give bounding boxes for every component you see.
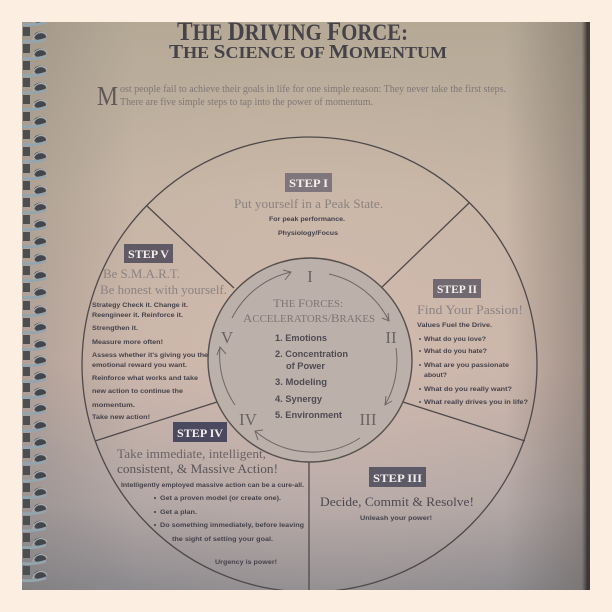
step 4 list <box>121 482 304 566</box>
roman numerals: IV <box>239 410 258 429</box>
step 2 heading: Find Your Passion! <box>417 302 523 317</box>
step 1 notes: For peak performance. <box>269 216 345 223</box>
step 5 list: Take new action! <box>92 414 150 421</box>
panel: step 3 <box>320 467 474 522</box>
step 5 list: Measure more often! <box>92 339 163 346</box>
intro line one: ost people fail to achieve their goals in life for one simple reason: They never take the first steps. <box>120 84 506 95</box>
step 2 list: Values Fuel the Drive. <box>417 322 492 329</box>
step 4 list: Urgency is power! <box>215 559 277 566</box>
step 2 list: What do you really want? <box>424 386 512 393</box>
step 5 heading: Be honest with yourself. <box>100 282 227 297</box>
step 1 label <box>285 173 332 192</box>
panel: step 2 <box>417 279 528 406</box>
step 5 list <box>92 302 208 421</box>
momentum wheel <box>82 137 537 592</box>
step 4 heading: consistent, & Massive Action! <box>117 461 278 476</box>
step 3 label <box>369 467 426 487</box>
step 2 list: about? <box>424 372 447 379</box>
step 4 list: the sight of setting your goal. <box>172 536 273 543</box>
step 4 list: Do something immediately, before leaving <box>160 522 304 529</box>
forces list <box>275 333 348 420</box>
step 1 label: STEP I <box>289 176 328 190</box>
step 4 label <box>173 422 227 442</box>
step 3 note: Unleash your power! <box>360 515 432 522</box>
step 5 list: Assess whether it's giving you the <box>92 352 208 359</box>
panel: step 1 <box>234 173 383 237</box>
roman numerals: II <box>385 328 397 347</box>
hub heading <box>243 296 375 325</box>
step 4 list: Intelligently employed massive action can be a cure-all. <box>121 482 304 489</box>
forces list: 4. Synergy <box>275 394 322 404</box>
panel: step 5 <box>92 244 227 421</box>
step 1 notes: Physiology/Focus <box>278 230 338 237</box>
step 3 heading: Decide, Commit & Resolve! <box>320 494 474 509</box>
step 5 heading <box>100 266 227 297</box>
step 4 label: STEP IV <box>177 426 223 440</box>
step 5 label: STEP V <box>128 247 169 261</box>
roman numerals: V <box>221 328 234 347</box>
forces list: 1. Emotions <box>275 333 327 343</box>
hub disc <box>208 258 412 462</box>
spokes <box>95 203 525 590</box>
roman numerals <box>221 267 397 429</box>
intro line two: There are five simple steps to tap into the power of momentum. <box>120 97 373 108</box>
step 5 list: Reinforce what works and take <box>92 375 198 382</box>
step 2 label: STEP II <box>437 282 477 296</box>
intro text <box>97 81 506 111</box>
step 2 list: What really drives you in life? <box>424 399 528 406</box>
roman numerals: I <box>307 267 313 286</box>
step 5 list: new action to continue the <box>92 388 183 395</box>
title line two: THE SCIENCE OF MOMENTUM <box>169 41 447 63</box>
step 5 list: Strengthen it. <box>92 325 138 332</box>
hub heading: THE FORCES: <box>273 296 343 310</box>
step 5 list: momentum. <box>92 402 135 409</box>
icon: spiral binding <box>22 10 47 581</box>
forces list: 2. Concentration <box>275 349 348 359</box>
step 2 list: What do you love? <box>424 336 486 343</box>
step 5 heading: Be S.M.A.R.T. <box>103 266 180 281</box>
drop cap: M <box>97 81 118 111</box>
step 4 list: Get a plan. <box>160 509 197 516</box>
cycle arrows <box>217 270 397 452</box>
centre hub <box>208 258 412 462</box>
title <box>169 17 447 63</box>
step 2 list: What are you passionate <box>424 362 509 369</box>
step 3 label: STEP III <box>373 471 422 485</box>
hub heading: ACCELERATORS/ BRAKES <box>243 311 375 325</box>
step 4 heading: Take immediate, intelligent, <box>117 446 266 461</box>
title line one: THE DRIVING FORCE: <box>177 17 408 46</box>
outer ring <box>82 137 537 592</box>
step 5 label <box>124 244 173 263</box>
step 2 list: What do you hate? <box>424 348 487 355</box>
panel: step 4 <box>117 422 304 566</box>
step 1 notes <box>269 216 345 237</box>
forces list: 3. Modeling <box>275 377 327 387</box>
step 5 list: Strategy Check it. Change it. <box>92 302 188 309</box>
step 2 list <box>417 322 528 406</box>
step 5 list: emotional reward you want. <box>92 362 187 369</box>
forces list: 5. Environment <box>275 410 342 420</box>
forces list: of Power <box>286 361 325 371</box>
step 4 list: Get a proven model (or create one). <box>160 495 281 502</box>
step 5 list: Reengineer it. Reinforce it. <box>92 312 183 319</box>
step 4 heading <box>117 446 278 476</box>
roman numerals: III <box>360 410 377 429</box>
step 1 heading: Put yourself in a Peak State. <box>234 196 383 211</box>
